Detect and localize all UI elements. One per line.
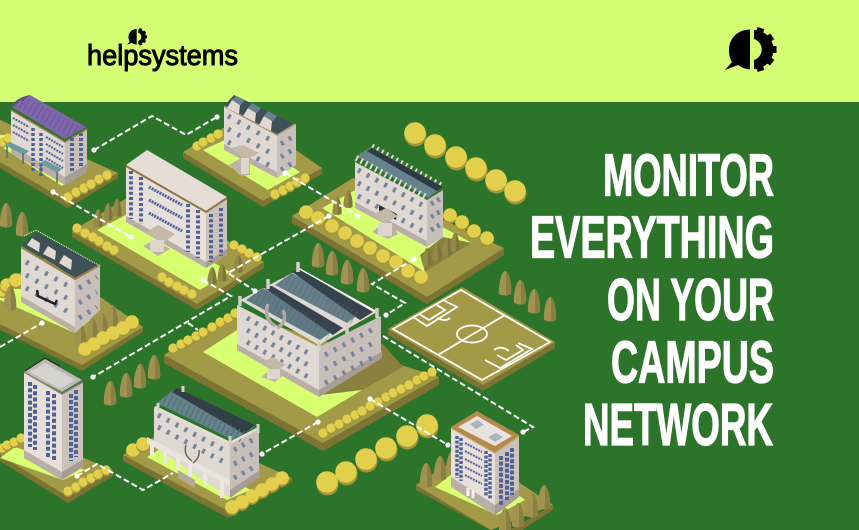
title (530, 142, 774, 458)
soccer field (388, 287, 555, 391)
building plot: bottom right tower (416, 411, 553, 530)
building plot: upper right with hedges (292, 146, 504, 304)
building plot: main campus hall (164, 262, 439, 451)
building plot: colonnade hall (123, 386, 292, 518)
header band (0, 0, 859, 102)
helpsystems logo (87, 28, 238, 72)
building plot: top middle (183, 95, 322, 207)
icon: speech bubble and gear (725, 27, 776, 72)
building plot: purple roof (0, 95, 118, 208)
helpsystems logo: helpsystems (87, 40, 238, 72)
tree rows (0, 122, 556, 495)
building plot: left middle (0, 230, 143, 371)
building plot: center with white tower block (72, 150, 264, 310)
network connection lines (0, 114, 533, 490)
building plot: tall tower bottom left (0, 358, 113, 503)
